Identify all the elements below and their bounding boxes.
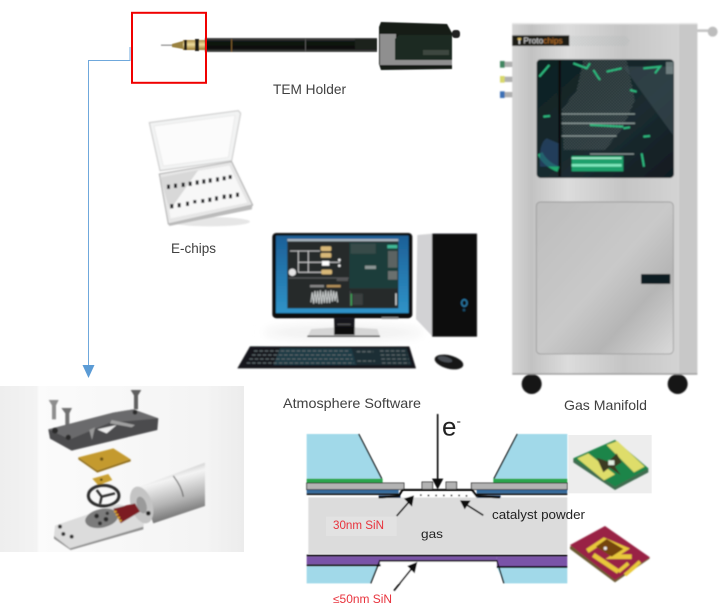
label: TEM Holder: TEM Holder — [273, 81, 346, 97]
black o-ring — [88, 485, 119, 506]
keyboard — [237, 346, 416, 368]
cover plate — [48, 409, 158, 451]
mouse — [433, 352, 465, 372]
TEM holder photo — [161, 22, 460, 70]
cross-section schematic of gas cell — [307, 411, 567, 591]
gold plate — [78, 448, 131, 473]
white cavity under membrane — [401, 492, 478, 497]
magnifier box: red frame around holder tip — [132, 13, 206, 83]
screws — [49, 390, 141, 430]
holder tip exploded view photo — [0, 386, 244, 552]
arrow: tip zoom leader line — [82, 47, 130, 378]
window with internals — [537, 59, 674, 178]
label: catalyst powder: catalyst powder — [492, 508, 585, 522]
label: 30nm SiN: 30nm SiN — [333, 520, 384, 532]
black arrows — [394, 414, 483, 591]
catalyst particles — [420, 494, 467, 497]
label: electron beam: e — [442, 411, 456, 441]
wheels — [522, 374, 688, 394]
lower door panel — [536, 202, 673, 354]
monitor stand — [307, 318, 380, 337]
knob — [697, 27, 718, 37]
gas manifold cabinet — [500, 23, 718, 394]
door handle — [641, 274, 670, 284]
top right window frame — [471, 434, 567, 498]
top membrane — [379, 490, 500, 497]
gas channel — [308, 497, 567, 554]
label background: 30nm SiN — [326, 517, 397, 536]
label: Atmosphere Software: Atmosphere Software — [283, 395, 421, 411]
vent — [570, 36, 630, 46]
PC tower — [416, 234, 477, 337]
tube and tip body — [54, 463, 205, 550]
Protochips logo plate — [512, 35, 569, 46]
top left window frame — [307, 434, 404, 498]
label: Gas Manifold: Gas Manifold — [564, 397, 647, 413]
E-chips box photo — [149, 111, 253, 226]
label: E-chips: E-chips — [171, 240, 216, 256]
cabinet body — [512, 23, 697, 375]
red E-chip photo — [570, 526, 650, 582]
label: gas: gas — [421, 527, 443, 541]
gas ports — [500, 61, 513, 98]
Protochips logo plate: Protochips — [523, 35, 563, 45]
small gold chip — [92, 474, 112, 485]
computer with Atmosphere software — [237, 233, 477, 372]
monitor — [272, 233, 412, 319]
label: electron beam: - — [456, 413, 461, 428]
bottom window layers — [307, 555, 567, 583]
green E-chip photo — [568, 435, 652, 493]
contact pads — [422, 482, 457, 489]
label: 50nm SiN: ≤50nm SiN — [333, 594, 392, 606]
